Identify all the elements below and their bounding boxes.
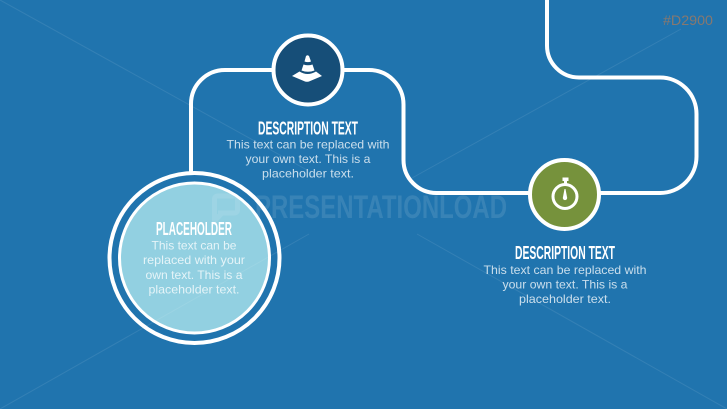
body text: your own text. This is a	[502, 278, 628, 292]
placeholder text: placeholder text.	[148, 282, 240, 296]
winding path line	[191, 0, 696, 193]
icon: stopwatch	[553, 178, 577, 208]
watermark	[214, 189, 507, 225]
node: cone icon circle	[274, 36, 342, 104]
heading: DESCRIPTION TEXT	[515, 243, 615, 263]
placeholder text	[143, 238, 245, 296]
body text: This text can be replaced with	[226, 138, 390, 152]
description 1	[226, 118, 390, 180]
placeholder text block	[143, 219, 245, 296]
icon: traffic cone	[292, 55, 322, 82]
body text	[484, 263, 646, 306]
node: stopwatch icon circle	[530, 160, 599, 229]
color code label: #D2900	[663, 12, 713, 28]
body text: placeholder text.	[519, 292, 611, 306]
body text	[226, 138, 390, 180]
placeholder heading: PLACEHOLDER	[156, 219, 232, 239]
body text: your own text. This is a	[246, 152, 371, 166]
placeholder text: replaced with your	[143, 253, 245, 267]
heading: DESCRIPTION TEXT	[258, 118, 358, 138]
description 2	[484, 243, 646, 306]
placeholder text: This text can be	[152, 238, 237, 252]
body text: This text can be replaced with	[484, 263, 646, 277]
watermark: PRESENTATIONLOAD	[255, 189, 507, 225]
node: placeholder circle	[110, 173, 280, 343]
placeholder text: own text. This is a	[146, 268, 243, 282]
body text: placeholder text.	[262, 166, 354, 180]
